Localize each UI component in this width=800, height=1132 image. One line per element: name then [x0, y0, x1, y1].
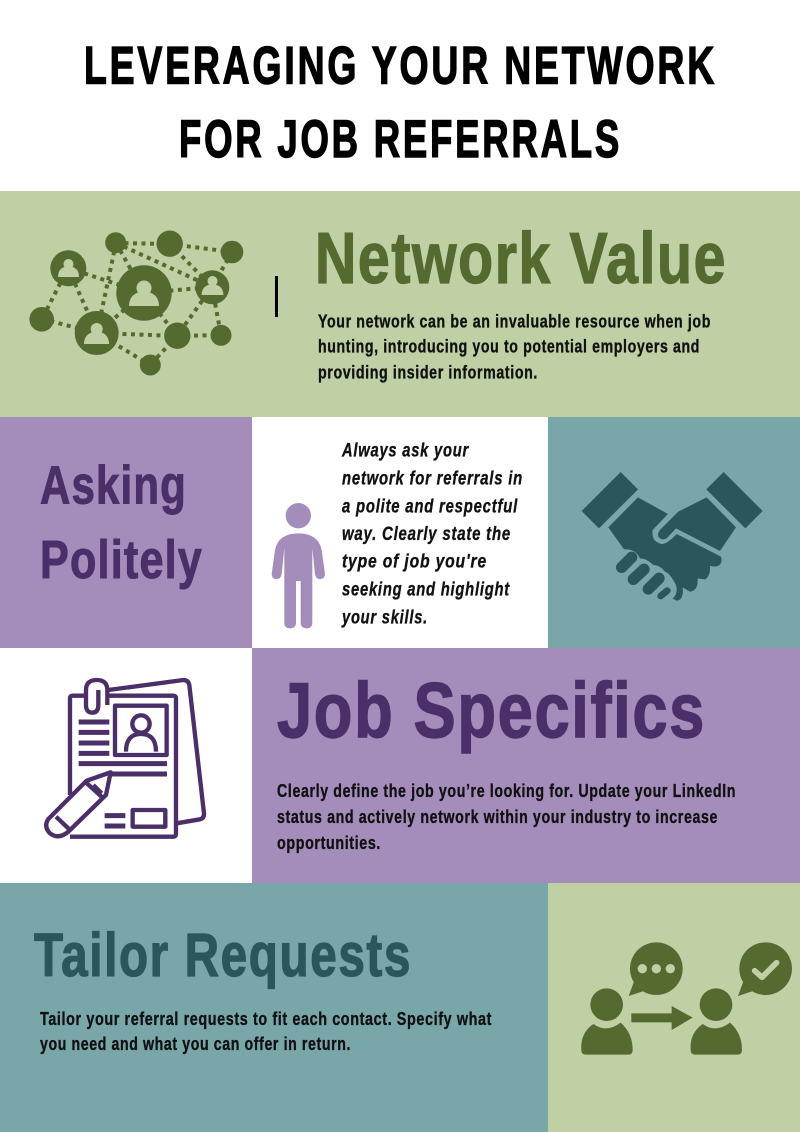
text: tailor requests body: you need and what you can offer in return. [40, 1033, 351, 1054]
text: network value body [318, 310, 711, 382]
text: network value body: providing insider information. [318, 361, 538, 382]
heading: asking politely: Politely [40, 530, 203, 590]
panel: asking politely [0, 417, 252, 648]
heading: job specifics: Job Specifics [277, 666, 706, 754]
divider bar [275, 276, 278, 317]
text: job specifics body: opportunities. [277, 832, 381, 853]
text: tailor requests body: Tailor your referral requests to fit each contact. Specify what [40, 1008, 492, 1029]
text: asking body: seeking and highlight [342, 580, 510, 601]
panel: network value [0, 191, 800, 417]
text: asking body: a polite and respectful [342, 496, 518, 517]
text: asking body: network for referrals in [342, 468, 523, 489]
text: job specifics body [277, 780, 736, 853]
text: asking body [341, 441, 523, 628]
icon: referral conversation [581, 942, 792, 1055]
text: asking body: your skills. [341, 607, 428, 628]
title [84, 36, 717, 169]
icon: network of people [29, 230, 243, 376]
panel: resume icon [0, 648, 252, 883]
text: asking body: way. Clearly state the [342, 524, 511, 545]
panel: handshake [548, 417, 800, 648]
icon: resume with pencil [46, 680, 204, 837]
panel: conversation icon [548, 883, 800, 1132]
text: asking body: Always ask your [341, 441, 469, 462]
text: asking body: type of job you're [342, 552, 487, 573]
text: tailor requests body [40, 1008, 492, 1054]
panel: asking body [252, 417, 548, 648]
heading: tailor requests: Tailor Requests [34, 921, 412, 989]
panel: job specifics [252, 648, 800, 883]
icon: handshake [582, 472, 763, 601]
icon: standing person [272, 503, 325, 628]
heading: asking politely [40, 456, 203, 590]
heading: asking politely: Asking [40, 456, 187, 516]
panel: tailor requests [0, 883, 548, 1132]
